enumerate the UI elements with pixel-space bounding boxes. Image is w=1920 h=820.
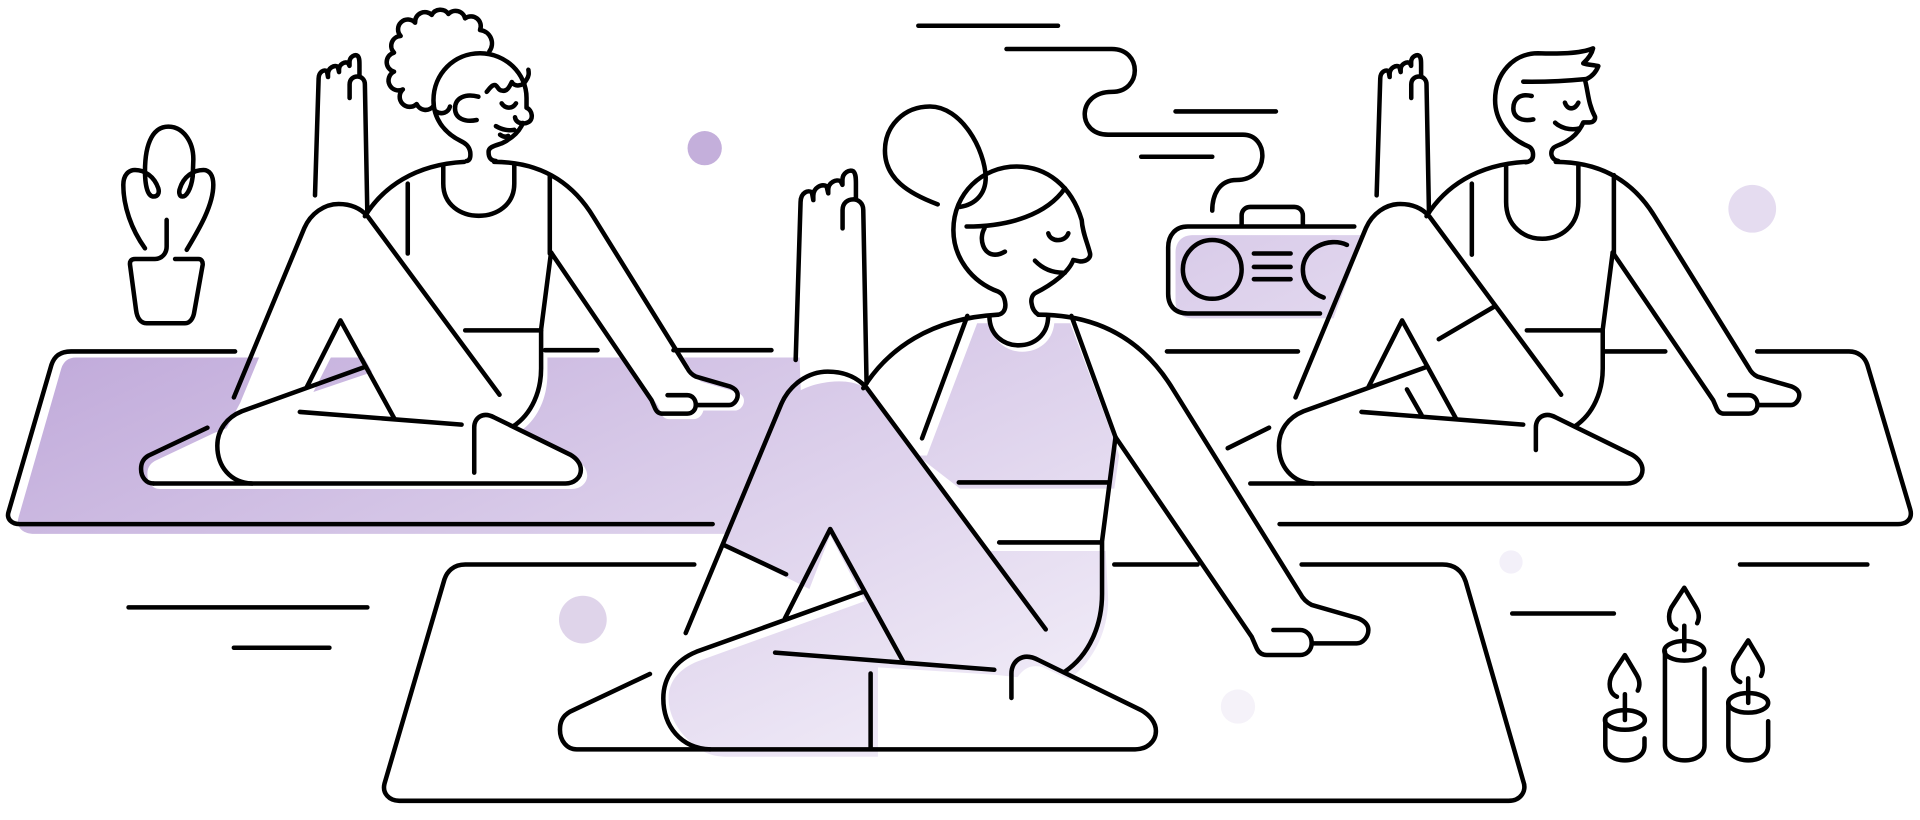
right mat outline (1167, 351, 1911, 524)
centre person outstretched arm (1038, 315, 1368, 655)
purple fill: centre person leg (669, 381, 1108, 757)
centre person ear (982, 228, 1005, 255)
decorative dot: left of centre mat (559, 596, 607, 643)
white silhouette: right person (1209, 161, 1806, 489)
person: right, seated twist (1228, 48, 1799, 484)
floor accent lines (129, 564, 1867, 648)
centre person ponytail (885, 107, 986, 207)
centre person raised leg (686, 372, 1046, 633)
person: left, seated twist (141, 10, 738, 484)
small candle (1605, 655, 1645, 760)
person: centre, seated twist (560, 107, 1368, 749)
centre person torso side and waist (959, 437, 1116, 672)
right person body (1228, 55, 1799, 484)
purple fill: left mat (18, 358, 801, 534)
right person head and hair (1407, 48, 1614, 415)
decorative dot: pale on centre mat (1221, 689, 1255, 724)
purple fill: radio (1176, 235, 1364, 318)
centre person seated base and feet (560, 657, 1156, 749)
white silhouette: left person (147, 161, 744, 489)
centre person closed eye (1048, 233, 1068, 240)
centre person crossed leg (663, 529, 994, 749)
icon: radio boombox (1168, 207, 1354, 313)
decorative dot: pale centre right (1499, 550, 1523, 574)
icon: three candles (1605, 588, 1768, 760)
centre person hair fringe (967, 188, 1065, 227)
centre person raised foot (796, 171, 867, 383)
decorative dot: upper right (1728, 185, 1776, 233)
smoke lines and music waves (918, 26, 1276, 211)
medium candle (1728, 640, 1768, 760)
left mat outline (8, 350, 771, 524)
icon: cactus in pot (123, 127, 213, 323)
centre mat outline (384, 564, 1524, 801)
decorative dot: dark purple (688, 131, 722, 165)
left person head and afro (387, 10, 550, 253)
centre person shoulder and neckline (863, 315, 1048, 388)
left person body (141, 55, 738, 484)
centre person tank straps (922, 316, 1116, 438)
tall candle (1664, 588, 1704, 760)
purple fill: centre person torso (917, 323, 1119, 489)
centre person smile (1035, 261, 1065, 273)
centre person head (953, 167, 1090, 315)
